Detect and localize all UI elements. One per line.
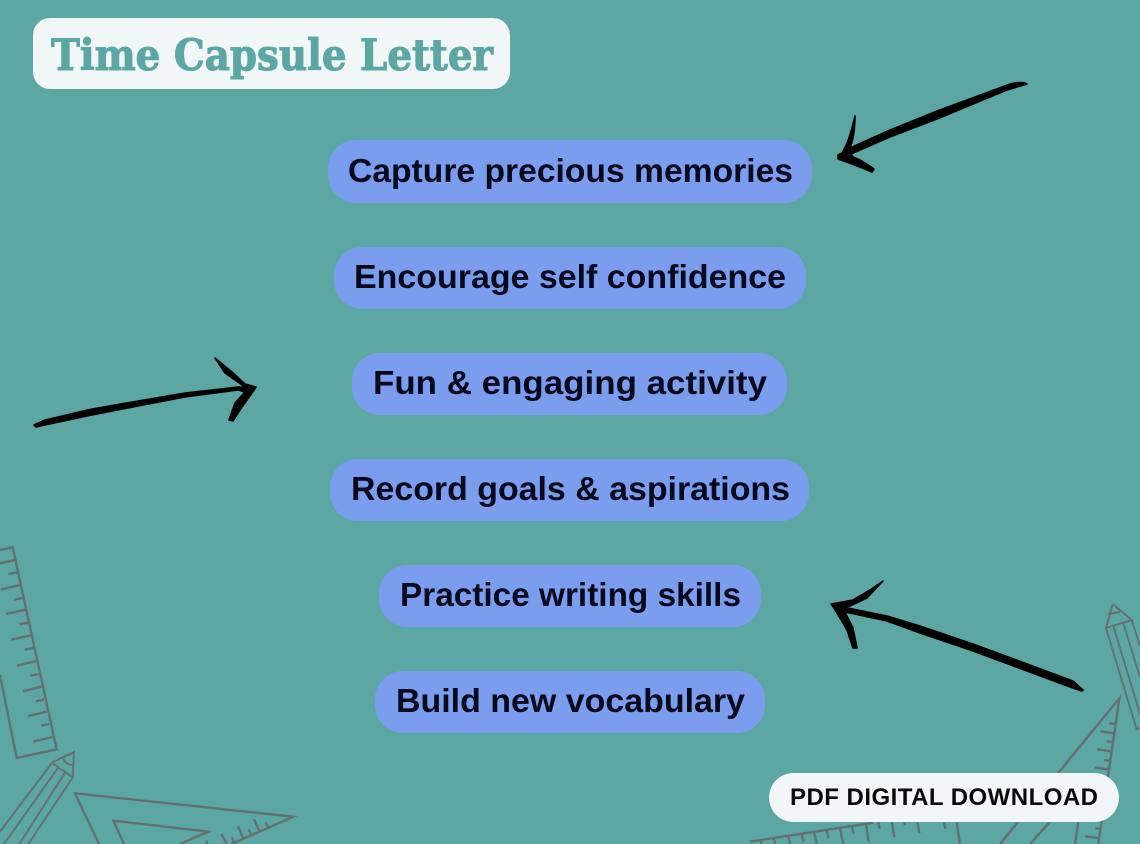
icon: ruler bottom right bbox=[750, 822, 960, 844]
benefit pill: encourage self confidence: Encourage self confidence bbox=[354, 258, 786, 295]
benefit pill: practice writing skills: Practice writing skills bbox=[400, 576, 741, 613]
benefit pill: fun and engaging activity: Fun & engaging activity bbox=[373, 364, 768, 401]
benefit pill: build new vocabulary: Build new vocabulary bbox=[396, 682, 746, 719]
icon: set square right bbox=[1000, 698, 1119, 844]
title: Time Capsule Letter bbox=[51, 31, 494, 81]
benefit pill: fun and engaging activity bbox=[352, 353, 787, 415]
download badge bbox=[769, 773, 1119, 822]
icon: pencil right bbox=[1106, 604, 1140, 729]
arrow: top right pointing left bbox=[838, 82, 1027, 172]
benefit pill: practice writing skills bbox=[379, 565, 761, 627]
icon: ruler left bbox=[0, 547, 57, 758]
benefit pill: capture precious memories: Capture precious memories bbox=[348, 152, 793, 189]
benefit pill: record goals and aspirations bbox=[330, 459, 809, 521]
icon: pencil left bbox=[0, 752, 74, 844]
icon: set square left bbox=[75, 793, 293, 844]
benefit pill: record goals and aspirations: Record goals & aspirations bbox=[351, 470, 790, 507]
badge label: PDF DIGITAL DOWNLOAD bbox=[790, 784, 1098, 811]
arrow: left pointing right bbox=[34, 358, 256, 427]
benefit pill: capture precious memories bbox=[328, 140, 812, 203]
benefit pill: build new vocabulary bbox=[375, 671, 765, 733]
benefit pill: encourage self confidence bbox=[334, 247, 806, 309]
title badge bbox=[33, 18, 510, 89]
arrow: bottom right pointing left bbox=[831, 581, 1083, 691]
